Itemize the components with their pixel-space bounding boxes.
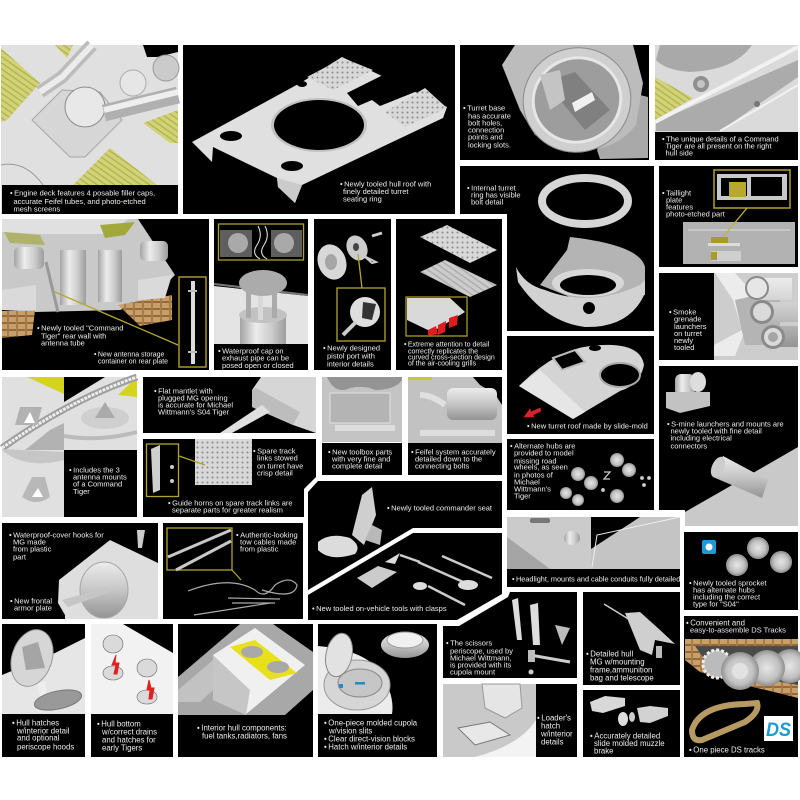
panel: engine deck: accurate Feifel tubes, and photo-etched xyxy=(14,197,146,206)
panel: DS tracks: • Convenient and xyxy=(686,618,745,628)
panel: tow cables: tow cables made xyxy=(240,538,296,546)
panel: air-cooling grills: correctly replicates the xyxy=(408,348,478,356)
mesh screen xyxy=(655,77,693,120)
panel: loader's hatch: w/interior xyxy=(540,730,573,738)
panel: tow cables: • Authentic-looking xyxy=(236,530,298,540)
hub parts xyxy=(560,453,651,506)
panel: alternate hubs: wheels, as seen xyxy=(513,462,568,472)
panel: waterproof hooks and frontal plate: from plastic xyxy=(13,544,52,554)
panel: antenna mounts: of a Command xyxy=(73,480,122,488)
panel: DS tracks xyxy=(684,616,800,757)
panel: hull bottom: • Hull bottom xyxy=(97,720,141,728)
panel: hull roof: finely detailed turret xyxy=(343,187,409,196)
icon: blue slide-mold badge xyxy=(702,540,716,554)
panel: engine deck xyxy=(1,45,179,214)
panel: DS tracks: easy-to-assemble DS Tracks xyxy=(690,626,786,634)
panel: air-cooling grills: of the air-cooling grills xyxy=(408,360,477,368)
panel: alternate hubs: Tiger xyxy=(514,492,531,500)
panel: muzzle brake: slide molded muzzle xyxy=(594,739,665,748)
panel: smoke grenade launchers: tooled xyxy=(674,343,694,352)
turret basket wall xyxy=(540,237,645,305)
panel: loader's hatch: details xyxy=(541,738,564,746)
antenna mount 1 xyxy=(15,407,42,425)
panel: commander seat xyxy=(308,481,502,590)
panel: flat mantlet xyxy=(143,377,316,433)
panel: hull MG xyxy=(583,592,680,685)
antenna mount 2 xyxy=(81,407,129,429)
panel: smoke grenade launchers xyxy=(659,273,798,360)
panel: turret base: points and xyxy=(468,132,503,142)
panel: Feifel system: connecting bolts xyxy=(415,462,469,470)
caption xyxy=(2,185,178,214)
antenna mount 3 xyxy=(22,477,50,502)
panel: spare track links: separate parts for greater realism xyxy=(172,506,283,514)
panel: air-cooling grills: curved cross-section design xyxy=(408,354,495,362)
panel: taillight plate xyxy=(659,166,798,267)
panel: antenna mounts: Tiger xyxy=(73,487,90,496)
tracks xyxy=(2,311,35,338)
antenna cable xyxy=(2,377,137,448)
panel: turret base: connection xyxy=(468,126,504,134)
panel: hull MG: bag and telescope xyxy=(590,674,654,682)
panel: turret roof xyxy=(507,336,654,434)
panel: spare track links: links stowed xyxy=(257,454,298,462)
panel: air-cooling grills xyxy=(396,219,502,370)
panel: cupola: • Hatch w/interior details xyxy=(324,742,407,752)
panel: alternate hubs: in photos of xyxy=(514,470,554,480)
panel: interior hull xyxy=(178,624,313,757)
yellow leader and inset xyxy=(55,292,178,345)
panel: turret base: locking slots. xyxy=(468,140,511,150)
panel: waterproof exhaust cap xyxy=(214,219,308,370)
panel: hull hatches: periscope hoods xyxy=(17,742,74,752)
panel: muzzle brake xyxy=(583,690,680,757)
inset frame xyxy=(406,297,467,336)
panel: headlight xyxy=(507,517,680,587)
road wheels xyxy=(773,649,800,683)
panel: tow cables xyxy=(163,523,303,619)
panel: smoke grenade launchers: newly xyxy=(674,336,693,345)
panel: pistol port xyxy=(313,219,391,370)
panel: antenna mounts xyxy=(2,377,137,517)
panel: turret base xyxy=(460,33,649,167)
panel: S-mine launchers: including electrical xyxy=(670,434,732,442)
panel: on-vehicle tools xyxy=(308,533,502,620)
inset frame xyxy=(146,444,178,496)
panel: waterproof hooks and frontal plate: • Waterproof-cover hooks for xyxy=(9,530,104,540)
panel: command tiger hull side: hull side xyxy=(666,148,693,158)
panel: internal turret ring xyxy=(460,166,654,331)
panel: cupola: • Clear direct-vision blocks xyxy=(324,734,415,744)
panel: hull MG: frame,ammunition xyxy=(590,666,652,674)
panel: spare track links: • Spare track xyxy=(253,446,296,456)
panel: engine deck: mesh screens xyxy=(14,204,60,214)
panel: interior hull: • Interior hull components: xyxy=(197,724,287,732)
panel: scissors periscope: periscope, used by xyxy=(450,646,513,656)
panel: scissors periscope: cupola mount xyxy=(450,668,496,676)
panel: spare track links: on turret have xyxy=(257,462,303,470)
panel: rear wall: • Newly tooled "Command xyxy=(37,324,123,332)
panel: rear wall: container on rear plate xyxy=(98,358,168,366)
red arrows xyxy=(112,655,119,674)
lower hull photo xyxy=(683,222,795,264)
panel: hull roof: seating ring xyxy=(343,194,382,204)
panel: hull bottom xyxy=(91,624,173,757)
panel: scissors periscope: • The scissors xyxy=(446,638,492,648)
panel: pistol port: interior details xyxy=(327,360,374,368)
panel: taillight plate: features xyxy=(666,202,693,212)
panel: S-mine launchers: newly tooled with fine detail xyxy=(670,426,762,436)
turret seating ring opening xyxy=(271,98,367,152)
panel: flat mantlet: • Flat mantlet with xyxy=(154,386,213,396)
panel: loader's hatch: hatch xyxy=(541,722,560,730)
separate cupola ring xyxy=(381,632,429,658)
panel: internal turret ring: ring has visible xyxy=(471,190,521,200)
panel: pistol port: • Newly designed xyxy=(323,344,380,352)
panel: headlight: • Headlight, mounts and cable conduits fully detailed xyxy=(512,574,680,584)
panel: toolbox: • New toolbox parts xyxy=(328,448,392,456)
panel: smoke grenade launchers: launchers xyxy=(674,322,707,331)
panel: smoke grenade launchers: grenade xyxy=(674,314,702,324)
panel: internal turret ring: bolt detail xyxy=(471,198,503,206)
panel: loader's hatch: • Loader's xyxy=(537,714,571,722)
panel: sprocket: • Newly tooled sprocket xyxy=(689,578,767,588)
panel: muzzle brake: • Accurately detailed xyxy=(590,732,660,740)
panel: S-mine launchers: • S-mine launchers and mounts are xyxy=(667,420,784,428)
panel: command tiger hull side: Tiger are all present on the right xyxy=(666,142,772,150)
panel: S-mine launchers: connectors xyxy=(670,442,707,450)
panel: waterproof exhaust cap: • Waterproof cap on xyxy=(218,346,284,356)
panel: hull bottom: w/correct drains xyxy=(101,728,157,736)
panel: alternate hubs: Michael xyxy=(514,478,540,486)
panel: muzzle brake: brake xyxy=(594,746,614,756)
one piece track loop xyxy=(692,703,758,740)
panel: turret roof: • New turret roof made by slide-mold xyxy=(527,422,648,430)
panel: command tiger hull side xyxy=(655,45,798,160)
panel: commander seat: • Newly tooled commander seat xyxy=(387,504,493,512)
panel: waterproof hooks and frontal plate: MG made xyxy=(13,538,46,546)
panel: toolbox: complete detail xyxy=(332,462,383,470)
callout frame xyxy=(714,170,790,208)
panel: hull roof xyxy=(183,45,455,214)
panel: flat mantlet: Wittmann's S04 Tiger xyxy=(158,408,230,416)
panel: interior hull: fuel tanks,radiators, fans xyxy=(202,732,287,740)
panel: hull bottom: and hatches for xyxy=(102,736,156,744)
panel: hull MG: MG w/mounting xyxy=(590,658,645,666)
panel: scissors periscope: is provided with its xyxy=(450,660,512,670)
panel: turret base: • Turret base xyxy=(463,104,505,112)
panel: taillight plate: plate xyxy=(666,196,682,204)
panel: sprocket: type for "S04" xyxy=(693,600,739,608)
panel: turret base: has accurate xyxy=(468,112,511,120)
seat xyxy=(318,536,358,557)
panel: spare track links: crisp detail xyxy=(257,468,293,478)
panel: air-cooling grills: • Extreme attention to detail xyxy=(404,342,490,348)
panel: sprocket xyxy=(684,532,798,610)
panel: cupola: • One-piece molded cupola xyxy=(324,718,418,728)
panel: antenna mounts: antenna mounts xyxy=(73,472,127,482)
panel: scissors periscope: Michael Wittmann, xyxy=(450,654,512,662)
panel: alternate hubs: missing road xyxy=(514,456,557,466)
panel: S-mine launchers xyxy=(659,366,798,526)
panel: toolbox xyxy=(322,377,402,475)
inset frame xyxy=(218,224,304,260)
panel: pistol port: pistol port with xyxy=(327,352,375,360)
panel: engine deck: • Engine deck features 4 posable filler caps, xyxy=(10,188,155,198)
panel: spare track links: • Guide horns on spare track links are xyxy=(168,498,293,508)
panel: waterproof hooks and frontal plate: part xyxy=(13,552,27,562)
panel: waterproof hooks and frontal plate xyxy=(2,523,158,619)
red arrow xyxy=(524,408,541,417)
panel: hull hatches: w/interior detail xyxy=(16,726,70,736)
panel: rear wall: • New antenna storage xyxy=(94,352,165,358)
panel: smoke grenade launchers: on turret xyxy=(674,329,703,338)
launcher xyxy=(675,374,695,396)
panel: rear wall xyxy=(2,219,209,370)
sprocket xyxy=(703,650,731,678)
engine deck grilles xyxy=(307,58,373,90)
panel: flat mantlet: plugged MG opening xyxy=(158,394,228,402)
panel: alternate hubs: provided to model xyxy=(514,448,574,458)
cables xyxy=(188,580,297,615)
panel: cupola: w/vision slits xyxy=(328,726,372,736)
panel: alternate hubs xyxy=(507,439,654,510)
panel: loader's hatch xyxy=(443,684,577,757)
turret ring xyxy=(542,178,628,224)
panel: flat mantlet: is accurate for Michael xyxy=(158,400,233,410)
panel: hull hatches xyxy=(2,624,85,757)
panel: alternate hubs: Wittmann's xyxy=(514,484,551,494)
panel: antenna mounts: • Includes the 3 xyxy=(69,466,120,474)
icon: DS logo: DS xyxy=(766,720,791,741)
panel: DS tracks: • One piece DS tracks xyxy=(689,746,765,754)
panel: hull roof: • Newly tooled hull roof with xyxy=(340,180,431,188)
Feifel tubes xyxy=(40,45,178,113)
panel: Feifel system xyxy=(408,377,502,475)
panel: taillight plate: photo-etched part xyxy=(666,210,726,218)
panel: alternate hubs: • Alternate hubs are xyxy=(510,442,575,450)
panel: hull bottom: early Tigers xyxy=(102,744,142,752)
panel: Feifel system: • Feifel system accurately xyxy=(411,448,496,456)
panel: spare track links xyxy=(143,439,316,517)
panel: hull hatches: and optional xyxy=(17,734,60,742)
panel: taillight plate: • Taillight xyxy=(662,188,692,198)
panel: waterproof hooks and frontal plate: armor plate xyxy=(14,604,52,612)
panel: command tiger hull side: • The unique details of a Command xyxy=(662,134,779,144)
panel: tow cables: from plastic xyxy=(240,544,279,554)
panel: waterproof exhaust cap: posed open or closed xyxy=(222,361,294,370)
panel: Feifel system: detailed down to the xyxy=(415,454,482,464)
panel: sprocket: including the correct xyxy=(693,592,761,602)
panel: rear wall: antenna tube xyxy=(41,338,85,348)
panel: smoke grenade launchers: • Smoke xyxy=(669,308,696,316)
photo-etched mesh screens xyxy=(1,45,178,185)
panel: cupola xyxy=(318,624,437,757)
panel: internal turret ring: • Internal turret xyxy=(467,184,517,192)
cylinders and cap xyxy=(60,250,86,305)
detail frame xyxy=(337,288,385,341)
panel: sprocket: has alternate hubs xyxy=(693,586,755,594)
panel: waterproof exhaust cap: exhaust pipe can be xyxy=(222,354,289,362)
panel: hull MG: • Detailed hull xyxy=(586,650,633,658)
panel: scissors periscope xyxy=(443,592,577,678)
inset frame xyxy=(167,528,232,570)
panel: turret base: bolt holes, xyxy=(468,118,502,128)
panel: toolbox: with very fine and xyxy=(331,454,390,464)
panel: rear wall: Tiger" rear wall with xyxy=(41,332,106,340)
panel: on-vehicle tools: • New tooled on-vehicle tools with clasps xyxy=(312,604,447,613)
panel: waterproof hooks and frontal plate: • New frontal xyxy=(10,596,52,606)
panel: hull hatches: • Hull hatches xyxy=(12,718,59,728)
